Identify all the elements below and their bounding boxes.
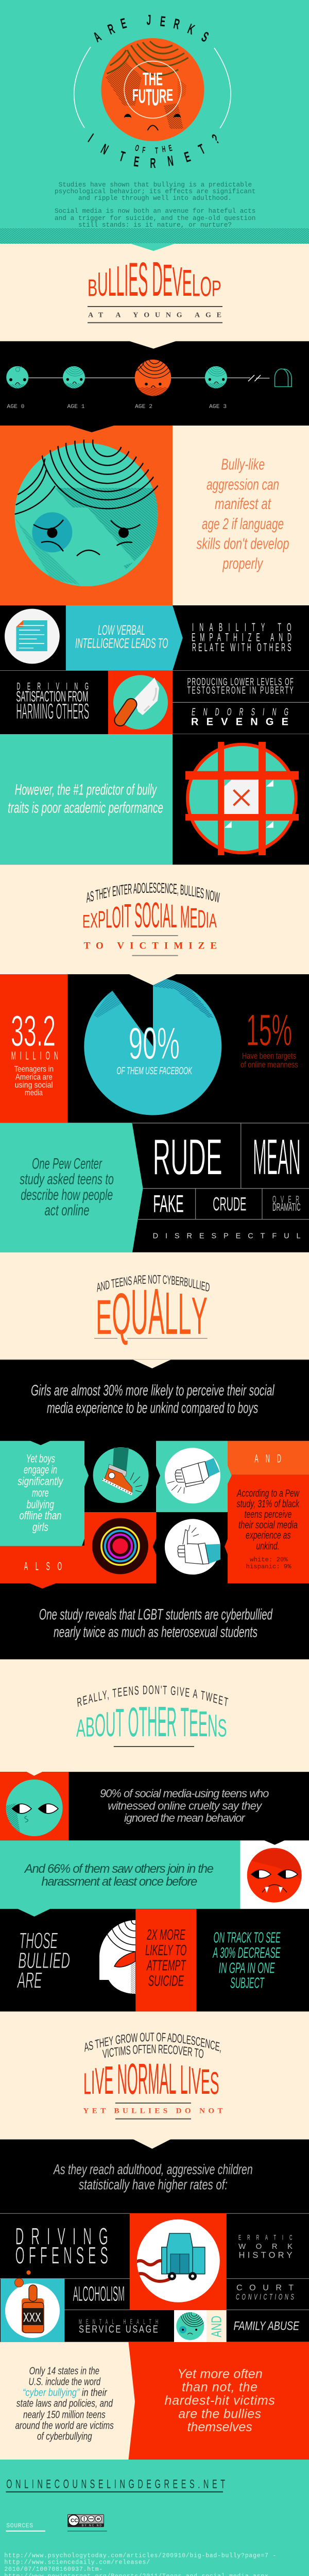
heading: exploit social media: S [134,896,142,935]
text: driving offenses [15,2223,108,2268]
box: boys bully offline [0,1441,89,1546]
heading: bullies develop: U [97,266,108,303]
heading: live normal lives: S [210,2066,219,2101]
box: also red [0,1512,156,1583]
title: are jerks: R [172,15,181,32]
text: 2x more likely [145,1927,186,1989]
text: court convictions: COURT [236,2284,294,2293]
text: driving offenses: DRIVING [15,2223,108,2250]
stat: 33.2 million: MILLION [11,1049,58,1062]
text: producing lower testosterone: PRODUCING LOWER LEVELS OF [187,676,294,688]
label: also: ALSO [24,1560,62,1572]
text: 90 percent ignored [100,1787,269,1824]
title: internet: ? [209,131,222,147]
panel: bully-like aggression [0,426,309,605]
icon: failing grid [185,742,299,855]
title: internet: R [150,155,156,171]
text: one pew center study: study asked teens to [20,1171,114,1188]
title: internet: E [182,148,192,165]
heading: about other teens: E [158,1698,167,1746]
word cloud: rude mean fake crude: DISRESPECTFUL [153,1232,301,1240]
subtitle: at a young age: AT A YOUNG AGE [88,311,221,319]
subtitle: yet bullies do not: YET BULLIES DO NOT [83,2107,222,2115]
heading: about other teens: U [106,1705,116,1744]
word cloud: rude mean fake crude: FAKE [153,1190,184,1217]
stat: 90 percent: OF THEM USE FACEBOOK [116,1065,193,1077]
title: future curved [132,84,173,111]
text: only 14 states: “cyber bullying” in their [23,2387,108,2399]
panel: academic performance [0,734,309,865]
text: 66 percent [24,1862,214,1889]
title: internet: N [98,141,111,158]
heading: live normal lives: I [91,2064,95,2102]
box: pew study black teens [225,1466,309,1583]
box: boys bully offline: bullying [27,1498,55,1511]
box: pew study black teens: white: 20% [250,1556,288,1564]
text: 2x more likely: 2X MORE [146,1927,185,1943]
arched text: really teens: REALLY, TEENS DON'T GIVE A TWEET [77,1685,229,1707]
icon: kicking shoe [93,1447,149,1503]
text: only 14 states: nearly 150 million teens [23,2409,106,2420]
source links [4,2552,296,2576]
title: are jerks: J [146,12,151,28]
heading: live normal lives: N [117,2056,127,2104]
heading: equally: L [164,1280,178,1347]
stat: 90 percent: 90% [129,1019,180,1069]
heading: about other teens: T [116,1701,124,1745]
heading: about other teens: O [128,1699,139,1745]
panel: 66 percent joined [0,1840,309,1909]
heading: bullies develop: E [163,256,173,306]
heading: exploit social media: M [180,899,190,935]
text: those bullied are: THOSE [19,1928,58,1954]
decorative arcs: left bracket [74,47,91,128]
heading: exploit social media: E [82,911,90,931]
intro text [55,181,255,229]
heading: bullies develop: L [192,268,200,303]
heading: bullies develop: B [88,275,97,301]
heading: exploit social media: I [160,896,163,935]
heading: bullies develop: E [128,253,138,307]
title: of the: T [155,146,158,156]
title: internet [85,131,222,171]
heading: exploit social media: L [106,904,112,934]
panel: state laws and hardest-hit victims [0,2342,309,2460]
text: 90 percent ignored: ignored the mean behavior [124,1811,246,1824]
icon: creative commons badge [67,2514,104,2528]
stat: 33.2 million: Teenagers in [14,1065,54,1074]
panel: footer [0,2460,309,2576]
text: mental health service usage [79,2318,158,2335]
text: erratic work history: WORK [238,2242,293,2251]
icon: large bruised teal face [14,439,159,586]
text: inability to empathize: INABILITY TO [192,621,291,634]
arched text: and teens are not cyberbullied: AND TEENS ARE NOT CYBERBULLIED [97,1275,210,1292]
box: boys bully offline: more [32,1486,48,1499]
arched text: as they grow out: AS THEY GROW OUT OF ADOLESCENCE, [84,2032,221,2053]
text: those bullied are [16,1928,70,1993]
heading: about other teens: A [76,1714,85,1742]
text: only 14 states: Only 14 states in the [29,2365,99,2377]
word cloud: rude mean fake crude [153,1128,301,1240]
box: and label [228,1441,309,1475]
text: only 14 states: state laws and policies, and [16,2398,113,2410]
heading: exploit social media [82,895,217,936]
text: yet more often: hardest-hit victims [165,2394,275,2408]
heading: equally: Q [112,1282,131,1347]
heading: exploit social media: A [209,909,217,932]
panel: social media statistics [0,974,309,1123]
title: are jerks: E [119,15,128,32]
heading: exploit social media: O [112,901,121,934]
text: inability to empathize: EMPATHIZE AND [192,631,291,643]
text: only 14 states: of cyberbullying [37,2431,92,2443]
stat: 33.2 million: America are [15,1073,53,1082]
heading: live normal lives: L [180,2057,188,2103]
title: of the [134,143,173,156]
text: mental health service usage: MENTAL HEALTH [79,2318,158,2326]
heading: exploit social media: I [121,899,124,935]
heading: about other teens: B [85,1711,95,1743]
text: deriving satisfaction [16,681,89,724]
text: yet more often [165,2367,275,2434]
text: 2x more likely: SUICIDE [148,1973,184,1989]
heading: exploit social media: O [142,895,151,936]
title: the future: T [143,69,149,89]
intro text: Studies have shown that bullying is a predictable [59,181,252,189]
source links: http://www.psychologytoday.com/articles/200910/big-bad-bully?page=7 - [4,2552,277,2559]
heading: about other teens: T [139,1698,147,1746]
heading: about other teens: H [147,1698,158,1746]
heading: bullies develop: L [108,260,116,304]
text: low verbal intelligence: INTELLIGENCE LEADS TO [75,636,168,651]
box: boys bully offline: girls [32,1521,48,1534]
text: number one predictor: However, the #1 predictor of bully [15,781,157,798]
title: internet: E [133,153,140,170]
heading: about other teens: N [208,1708,218,1743]
heading: live normal lives: E [201,2062,210,2102]
box: pew study black teens: unkind. [256,1540,279,1552]
heading: exploit social media: T [124,897,131,935]
heading: live normal lives: E [104,2058,113,2103]
text: one pew center study [20,1155,114,1219]
box: middle finger bottom [153,1512,228,1583]
text: 66 percent: harassment at least once before [41,1875,197,1889]
box: pew study black teens: experience as [246,1530,290,1541]
source links: http://www.sciencedaily.com/releases/ [4,2560,150,2566]
text: bully-like aggression: manifest at [215,495,271,513]
heading: about other teens: O [95,1707,106,1743]
age labels [7,404,227,410]
icon: face age 0 [6,366,29,389]
intro text: Social media is now both an avenue for hateful acts [55,208,255,215]
source links: 2010/07/100708160937.htm- [4,2566,103,2573]
title: of the: E [168,143,173,154]
title: future curved: U [152,84,159,111]
heading: bullies develop: I [124,256,128,306]
text: 2x more likely: ATTEMPT [146,1957,186,1974]
icon: document [5,609,60,664]
panel: low verbal intelligence [0,605,309,671]
heading: bullies develop: E [182,262,192,304]
heading: bullies develop: L [116,258,124,306]
icon: creative commons badge: BY NC ND [82,2524,101,2528]
title: are jerks: R [106,21,117,38]
title: internet: T [117,148,127,165]
text: 90 percent ignored: witnessed online cruelty say they [108,1799,263,1812]
icon: tombstone [274,369,292,386]
arched text: as they enter adolescence: AS THEY ENTER ADOLESCENCE, BULLIES NOW [87,883,220,903]
age labels: AGE 3 [209,404,227,410]
text: mental health service usage: SERVICE USAGE [79,2324,158,2335]
box: bus and road [130,2213,227,2310]
title: future curved: F [132,86,139,105]
text: yet more often: are the bullies [178,2406,261,2421]
stat: 33.2 million: using social [15,1081,53,1090]
icon: small bruised face [174,2310,207,2342]
heading: equally: L [178,1282,191,1347]
text: inability to empathize: RELATE WITH OTHERS [192,641,291,654]
text: number one predictor: traits is poor academic performance [8,799,163,816]
title: internet: T [196,141,208,158]
text: yet more often: themselves [187,2420,252,2434]
title: future curved: U [139,86,146,107]
box: boys bully offline: engage in [24,1463,57,1476]
panel: those bullied are [0,1909,309,2011]
panel: about other teens heading [0,1659,309,1772]
icon: knife [113,675,168,730]
heading: about other teens: R [167,1699,177,1745]
heading: bullies develop: D [152,252,163,307]
intro text: psychological behavior; its effects are significant [55,188,255,195]
text: deriving satisfaction: DERIVING [16,681,89,692]
panel: girls 30 percent [0,1360,309,1659]
heading: bullies develop: V [173,259,182,305]
text: 30 percent decrease in gpa: SUBJECT [230,1975,265,1991]
panel: bullies develop heading [0,243,309,342]
heading: live normal lives: M [148,2055,159,2104]
heading: bullies develop [88,252,221,307]
heading: live normal lives: R [138,2055,148,2104]
box: and rotated [207,2310,227,2342]
panel: live normal lives heading [0,2011,309,2139]
text: endorsing revenge: REVENGE [191,717,288,728]
arched text: victims often recover: VICTIMS OFTEN RECOVER TO [102,2044,204,2058]
icon: face age 3 [205,366,227,388]
text: erratic work history [238,2234,293,2260]
heading: exploit social media: I [206,907,209,933]
title: are jerks [91,12,211,45]
icon: creative commons badge: CC [71,2518,78,2523]
heading: bullies develop: O [200,271,212,302]
panel: equally heading [0,1252,309,1360]
age labels: AGE 0 [7,404,25,410]
text: those bullied are: ARE [16,1968,42,1993]
title: are jerks: K [185,21,197,38]
text: yet more often: than not, the [182,2380,258,2395]
heading: exploit social media: X [90,909,98,932]
heading: about other teens: E [189,1702,198,1745]
icon: red vampire face [247,1848,304,1903]
sources heading: SOURCES [6,2523,33,2530]
heading: equally: Y [191,1287,207,1346]
text: those bullied are: BULLIED [18,1948,70,1973]
heading: live normal lives: O [127,2055,138,2104]
text: endorsing revenge: ENDORSING [192,706,288,718]
text: low verbal intelligence: LOW VERBAL [98,622,145,638]
text: producing lower testosterone [187,676,294,697]
title: future curved: E [166,86,173,105]
subtitle: to victimize: TO VICTIMIZE [84,941,217,952]
stat: 33.2 million [11,1007,58,1097]
title: of the: O [134,143,140,154]
heading: live normal lives: L [83,2067,91,2100]
box: and rotated: AND [208,2316,224,2337]
title: are jerks: S [199,28,211,45]
word cloud: rude mean fake crude: RUDE [153,1128,222,1185]
text: bully-like aggression: Bully-like [221,455,265,473]
intro text: and ripple through well into adulthood. [78,195,232,202]
heading: equally: U [131,1277,148,1348]
title: are jerks: E [159,13,166,29]
heading: exploit social media: A [163,896,170,935]
text: as they reach adulthood [53,2161,253,2192]
heading: about other teens [76,1698,227,1746]
title: future curved: R [159,86,166,107]
box: alcohol bottle: XXX [23,2311,41,2325]
intro text: and a trigger for suicide, and the age-old question [55,215,255,222]
heading: live normal lives [83,2055,219,2104]
heading: equally: A [148,1275,164,1348]
heading: live normal lives: I [188,2058,192,2103]
text: as they reach adulthood: statistically have higher rates of: [79,2176,228,2192]
text: yet more often: Yet more often [177,2367,263,2381]
heading: live normal lives: L [168,2055,176,2104]
intro text: still stands: is it nature, or nurture? [78,222,232,229]
text: producing lower testosterone: TESTOSTERONE IN PUBERTY [187,685,294,697]
icon: face age 2 [135,360,171,396]
text: girls perceive [31,1382,275,1417]
panel: pew words [0,1123,309,1252]
text: 2x more likely: LIKELY TO [145,1942,186,1959]
icon: target [92,1518,148,1574]
age labels: AGE 2 [135,404,152,410]
panel: title header [0,0,309,244]
panel: adult outcomes grid [0,2213,309,2342]
title: the future: E [156,69,163,89]
panel: satisfaction, testosterone, revenge: SATISFACTION FROM [16,689,88,705]
title: internet: N [166,152,175,170]
pie chart: 90 percent use facebook [84,976,221,1115]
heading: exploit social media: L [170,898,177,935]
text: 30 percent decrease in gpa [212,1930,281,1991]
text: erratic work history: ERRATIC [238,2234,293,2242]
panel: age timeline [0,341,309,408]
site name: ONLINECOUNSELINGDEGREES.NET [6,2478,225,2491]
box: boys bully offline: Yet boys [26,1452,55,1465]
stat: 33.2 million: media [25,1089,43,1097]
box: pew study black teens: hispanic: 9% [246,1563,291,1570]
heading: about other teens: E [198,1704,208,1744]
box: alcohol bottle [1,2270,65,2342]
heading: equally: E [96,1290,112,1345]
word cloud: rude mean fake crude: CRUDE [213,1193,246,1214]
heading: about other teens: T [181,1699,189,1745]
icon: teal side-eye face [6,1780,63,1836]
icon: half head [99,1920,135,1994]
title: future curved: T [146,84,152,111]
heading: exploit social media: E [190,902,197,934]
text: bully-like aggression: properly [222,554,264,572]
text: only 14 states [15,2365,114,2443]
title: internet: I [85,131,96,145]
text: lgbt students [39,1606,273,1641]
panel: adulthood intro [0,2139,309,2213]
text: low verbal intelligence [75,622,168,651]
heading: live normal lives: A [159,2055,168,2104]
stat: 90 percent [116,1019,193,1077]
heading: exploit social media: P [98,906,106,933]
heading: live normal lives: V [95,2060,104,2103]
icon: face age 1 [63,366,85,388]
heading: bullies develop: P [212,276,221,301]
title: of the: F [142,145,146,155]
title: of the: H [161,144,166,154]
text: one pew center study: act online [44,1202,90,1219]
text: erratic work history: HISTORY [239,2251,293,2260]
text: only 14 states: U.S. include the word [29,2376,101,2387]
text: number one predictor [8,781,163,816]
text: one pew center study: describe how people [21,1187,113,1204]
panel: adult outcomes grid: ALCOHOLISM [73,2282,125,2306]
age labels: AGE 1 [67,404,85,410]
text: 90 percent ignored: 90% of social media-using teens who [100,1787,269,1800]
panel: satisfaction, testosterone, revenge: HARMING OTHERS [16,699,89,724]
panel: satisfaction, testosterone, revenge [0,671,309,735]
word cloud: rude mean fake crude: OVER [272,1194,299,1205]
decorative arcs: right bracket [214,48,231,128]
box: middle finger top [156,1441,228,1512]
stat: 15 percent [241,1006,298,1070]
panel: witnessed cruelty [0,1772,309,1840]
text: 66 percent: And 66% of them saw others join in the [24,1862,214,1876]
title: the future: H [149,69,156,89]
text: only 14 states: around the world are victims [15,2420,114,2431]
icon: orange face [101,38,204,141]
text: one pew center study: One Pew Center [32,1155,102,1172]
heading: live normal lives: V [192,2060,201,2103]
heading: exploit social media: D [197,905,206,933]
heading: about other teens: S [218,1714,227,1742]
heading: exploit social media: C [151,895,160,936]
heading: bullies develop: S [138,253,148,307]
box: boys bully offline: offline than [20,1509,62,1522]
text: endorsing revenge [191,706,288,728]
text: driving offenses: OFFENSES [15,2242,108,2268]
title: are jerks: A [91,28,104,45]
box: and label: AND [254,1452,281,1465]
stat: 33.2 million: 33.2 [11,1007,56,1055]
text: court convictions: CONVICTIONS [236,2292,294,2301]
text: court convictions [236,2284,294,2301]
title: the future [143,69,163,89]
box: boys bully offline: significantly [18,1475,64,1488]
text: inability to empathize [192,621,291,654]
panel: exploit social media heading [0,865,309,984]
text: bully-like aggression [197,455,289,572]
heading: equally [96,1275,207,1348]
